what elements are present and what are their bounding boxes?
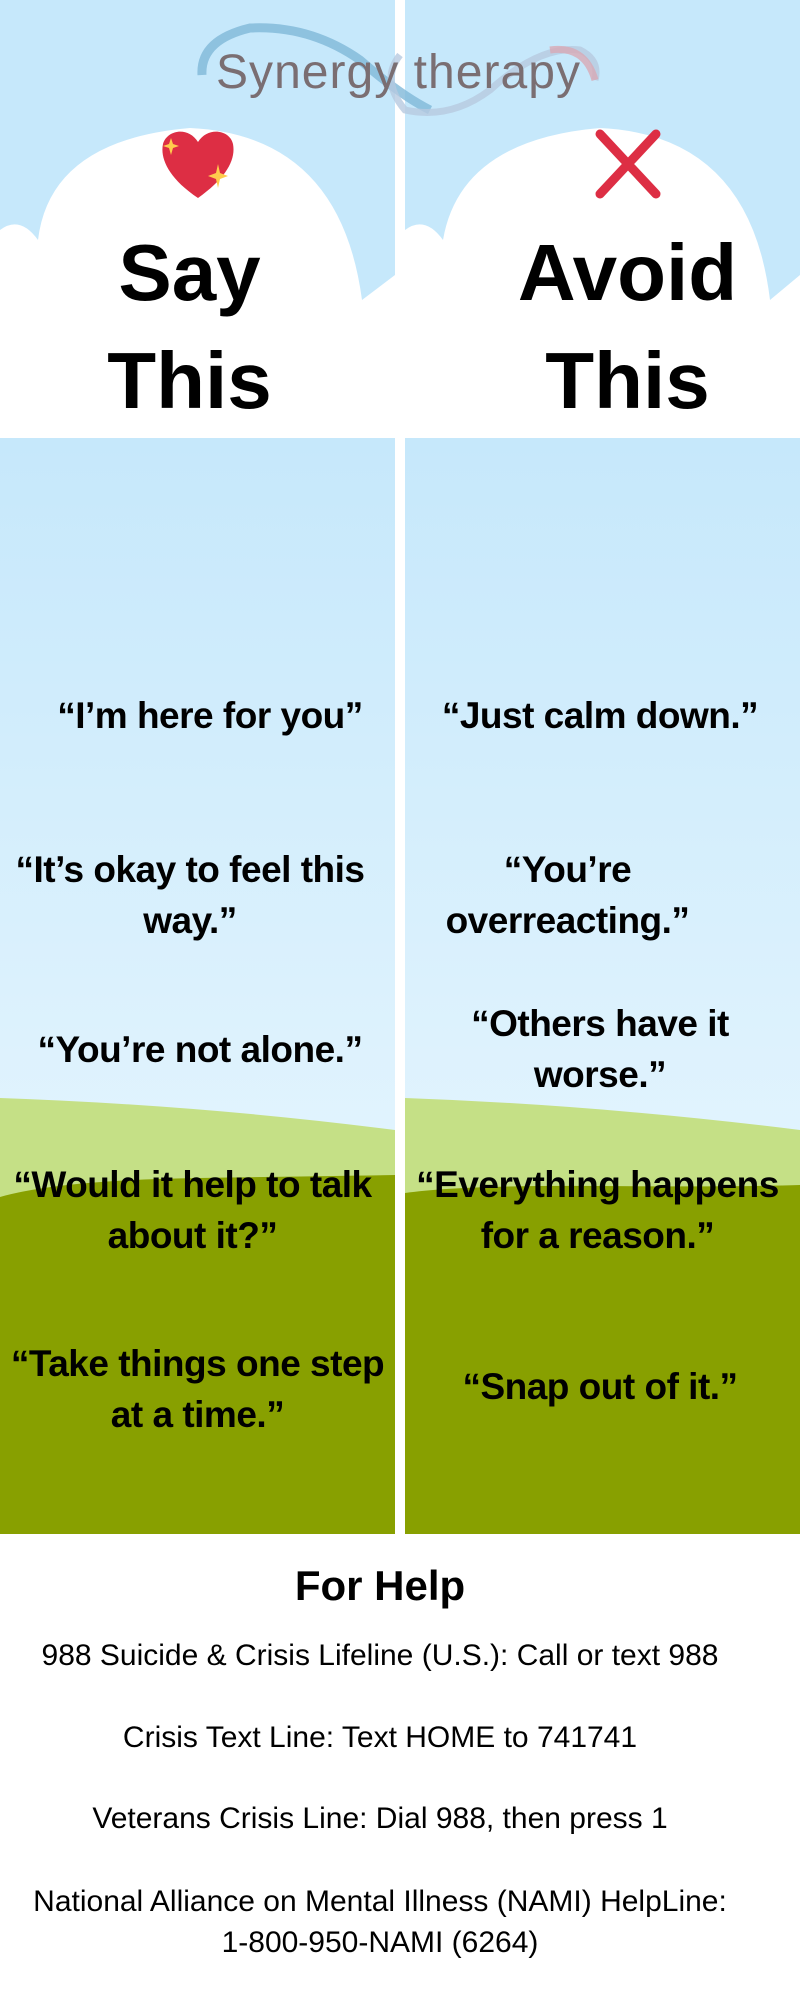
- quote: one step: at a time.”: [111, 1394, 284, 1435]
- line: NAMI: [33, 1885, 727, 1959]
- footer: for help: [33, 1562, 727, 1959]
- heading: Say This: [107, 228, 272, 425]
- heading: Avoid This: [518, 228, 737, 425]
- quote: talk about it: [13, 1164, 372, 1256]
- heading: Say This: Say: [118, 228, 261, 317]
- heading: Avoid This: This: [545, 336, 710, 425]
- heading: Say This: This: [107, 336, 272, 425]
- quote: everything happens: [416, 1164, 779, 1256]
- quote: okay to feel: way.”: [143, 900, 237, 941]
- logo: Synergy therapy: [216, 46, 580, 99]
- footer heading: For Help: [295, 1562, 465, 1609]
- quote: overreacting: “You’re: [504, 849, 631, 890]
- panel: say this: [11, 695, 384, 1435]
- icon: red x: [596, 130, 660, 198]
- quote: talk about it: about it?”: [108, 1215, 277, 1256]
- quote: okay to feel: [16, 849, 364, 941]
- background scene: [0, 0, 800, 1534]
- quote: talk about it: “Would it help to talk: [13, 1164, 372, 1205]
- heading: Avoid This: Avoid: [518, 228, 737, 317]
- quote: one step: “Take things one step: [11, 1343, 384, 1384]
- quote: calm down: “Just calm down.”: [442, 695, 758, 736]
- logo: [197, 23, 600, 116]
- quote: here for you: “I’m here for you”: [57, 695, 363, 736]
- line: 988: 988 Suicide & Crisis Lifeline (U.S.): Call or text 988: [42, 1639, 718, 1672]
- line: crisis text: Crisis Text Line: Text HOME to 741741: [123, 1721, 637, 1754]
- quote: overreacting: [446, 849, 689, 941]
- line: NAMI: 1-800-950-NAMI (6264): [222, 1926, 538, 1959]
- quote: others worse: [471, 1003, 729, 1095]
- quote: overreacting: overreacting.”: [446, 900, 689, 941]
- icon: heart: [162, 132, 234, 198]
- quote: one step: [11, 1343, 384, 1435]
- quote: everything happens: “Everything happens: [416, 1164, 779, 1205]
- quote: others worse: worse.”: [534, 1054, 666, 1095]
- quote: not alone: “You’re not alone.”: [38, 1029, 362, 1070]
- quote: others worse: “Others have it: [471, 1003, 729, 1044]
- line: veterans: Veterans Crisis Line: Dial 988, then press 1: [92, 1802, 668, 1835]
- quote: okay to feel: “It’s okay to feel this: [16, 849, 364, 890]
- line: NAMI: National Alliance on Mental Illness (NAMI) HelpLine:: [33, 1885, 727, 1918]
- quote: everything happens: for a reason.”: [481, 1215, 714, 1256]
- quote: snap out: “Snap out of it.”: [462, 1366, 738, 1407]
- panel: avoid this: [416, 695, 779, 1407]
